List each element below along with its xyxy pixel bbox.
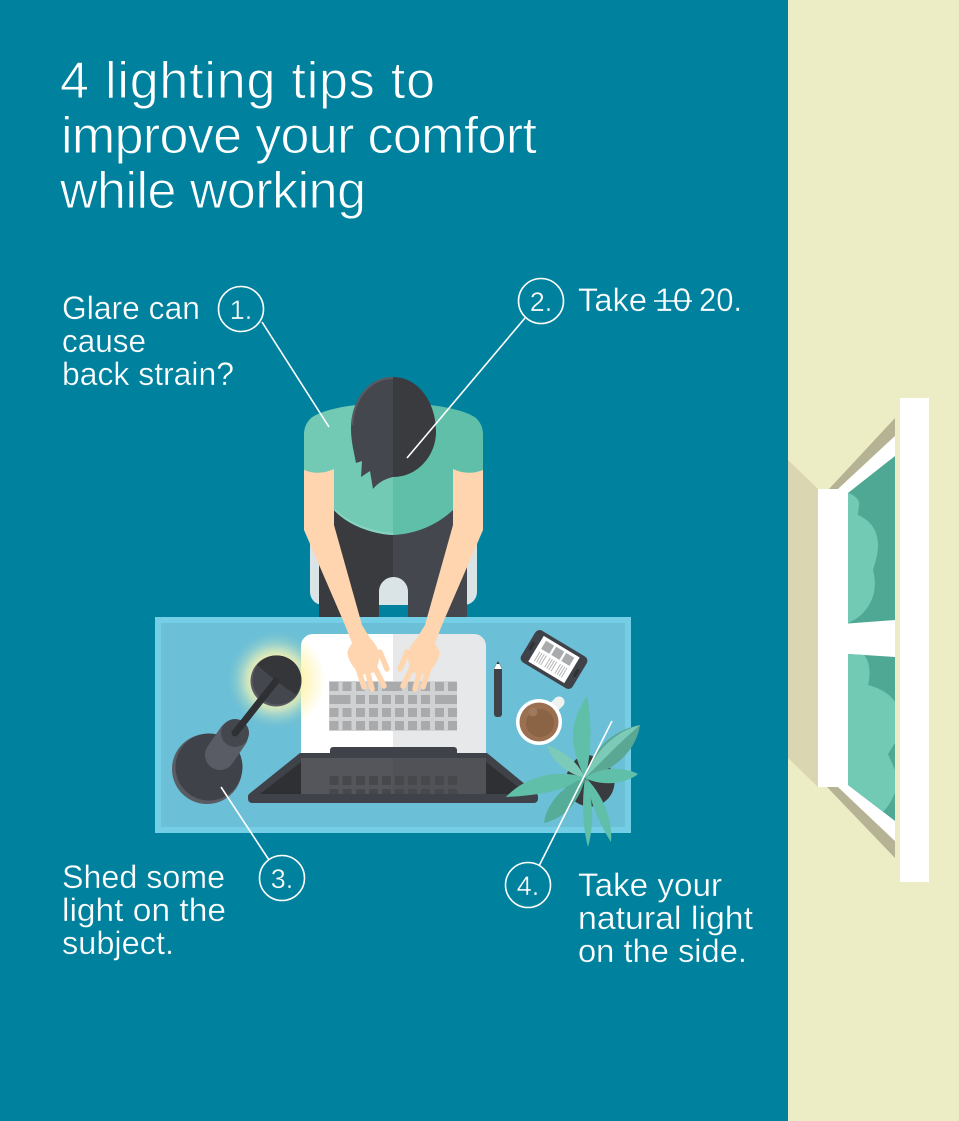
lamp glow bbox=[225, 629, 327, 731]
title bbox=[59, 52, 538, 220]
plant bbox=[506, 696, 640, 847]
lower pane bbox=[848, 654, 895, 821]
coffee cup bbox=[516, 699, 562, 745]
chair bbox=[310, 530, 477, 605]
tip 2 text: 10 bbox=[655, 282, 691, 318]
tip 2 badge: 2. bbox=[530, 287, 552, 317]
tip 2 leader line bbox=[407, 318, 525, 458]
hinge bbox=[330, 747, 457, 753]
desk bbox=[155, 617, 631, 833]
tip 2 text: Take bbox=[578, 282, 647, 318]
pot bbox=[566, 755, 614, 806]
outer sash bbox=[900, 398, 929, 882]
tip 1 text: cause bbox=[62, 323, 146, 359]
title: 4 lighting tips to bbox=[60, 52, 435, 110]
tip 3 badge: 3. bbox=[271, 864, 293, 894]
lamp bbox=[172, 655, 302, 804]
screen lid bbox=[301, 634, 393, 753]
lamp neck bbox=[220, 719, 249, 755]
tip 4 text: natural light bbox=[578, 900, 753, 936]
tip 4 badge: 4. bbox=[517, 871, 539, 901]
illustration: laptop bbox=[226, 630, 538, 803]
right arm and hand bbox=[400, 469, 483, 689]
tip 4 leader line bbox=[539, 721, 612, 866]
hair bbox=[351, 377, 436, 489]
window bbox=[788, 398, 929, 882]
tip 4 text: Take your bbox=[578, 867, 722, 903]
tip 1 text bbox=[62, 290, 234, 392]
upper pane bbox=[848, 456, 895, 624]
phone bbox=[519, 628, 589, 691]
pencil bbox=[494, 661, 502, 717]
lamp base bbox=[172, 734, 242, 804]
arms and hands bbox=[304, 469, 483, 689]
tip 3 bbox=[62, 787, 304, 961]
tip 3 text: subject. bbox=[62, 925, 174, 961]
top reveal shadow bbox=[829, 418, 895, 489]
tip 3 leader line bbox=[221, 787, 269, 860]
leaves bbox=[506, 696, 640, 847]
tip 4 badge bbox=[506, 862, 550, 908]
keyboard reflection bbox=[330, 776, 457, 794]
tip 2 badge bbox=[518, 278, 564, 324]
tip 3 text: light on the bbox=[62, 892, 226, 928]
tip 1 text: back strain? bbox=[62, 356, 234, 392]
tip 3 text: Shed some bbox=[62, 859, 225, 895]
tip 3 badge bbox=[260, 856, 304, 900]
tip 4 text: on the side. bbox=[578, 933, 747, 969]
bottom reveal shadow bbox=[827, 787, 895, 858]
tip 1 badge bbox=[218, 286, 264, 332]
tip 2 bbox=[407, 278, 742, 458]
left arm and hand bbox=[304, 469, 387, 689]
tip 4 text bbox=[578, 867, 753, 969]
wall shadow bbox=[788, 460, 818, 787]
window frame bbox=[838, 436, 895, 841]
base bbox=[248, 753, 538, 803]
tip 4 bbox=[506, 721, 753, 969]
tip 3 text bbox=[62, 859, 226, 961]
tip 2 text: 20. bbox=[699, 282, 742, 318]
keyboard bbox=[329, 681, 457, 731]
title: while working bbox=[59, 162, 366, 220]
legs bbox=[319, 500, 467, 617]
tip 1 bbox=[62, 286, 329, 427]
tip 1 text: Glare can bbox=[62, 290, 200, 326]
tip 2 text bbox=[578, 282, 742, 318]
lamp head bbox=[250, 655, 302, 706]
illustration: person at chair bbox=[304, 377, 483, 617]
lamp arm bbox=[235, 681, 276, 733]
screen reflection bbox=[301, 758, 393, 794]
background: cream wall bbox=[788, 0, 959, 1121]
tip 1 badge: 1. bbox=[230, 295, 252, 325]
title: improve your comfort bbox=[61, 107, 538, 165]
tip 1 leader line bbox=[262, 322, 329, 427]
shirt bbox=[304, 403, 483, 535]
